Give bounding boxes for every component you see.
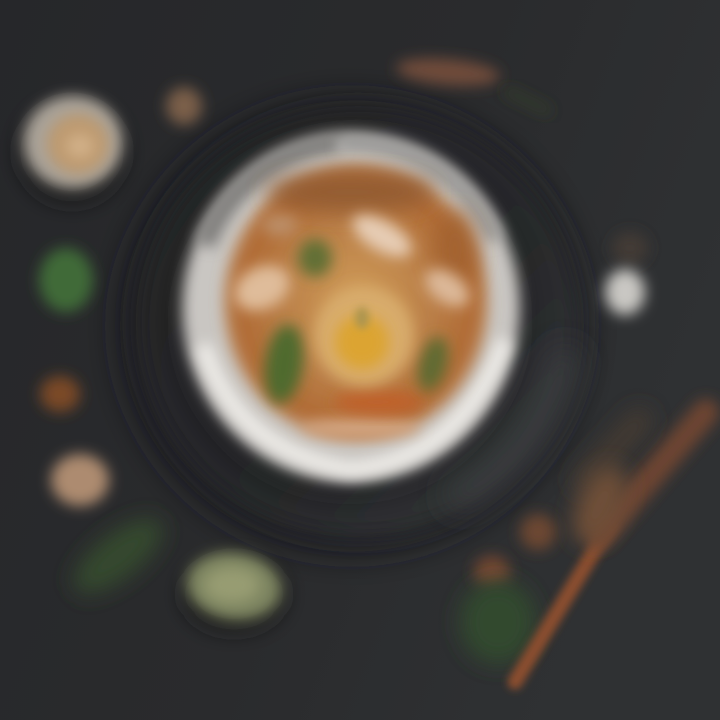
small bowl: top left spice [20, 95, 124, 202]
ingredient: right garlic clove [605, 232, 648, 315]
soup broth [224, 164, 488, 440]
ingredient: lower right leaves [460, 580, 536, 664]
soup ingredients: central egg [314, 286, 414, 386]
ingredient: left pale nut [51, 454, 109, 506]
ingredient: left green leaf [39, 248, 93, 312]
ingredient: top cinnamon stick [395, 55, 550, 112]
ingredient: lime slice [182, 546, 286, 630]
soup ingredients: chicken pieces [227, 207, 476, 319]
ingredient: lower left leaf [62, 505, 174, 607]
ingredient: top nut [166, 87, 202, 125]
plate: dark round plate [120, 100, 584, 552]
soup ingredients: green herbs [260, 239, 454, 406]
chopsticks: wooden spoon and sticks [515, 412, 706, 682]
bowl: white rim and soup [178, 134, 522, 494]
ingredient: lower right spices [474, 514, 556, 588]
ingredient: left orange spice [40, 376, 80, 412]
